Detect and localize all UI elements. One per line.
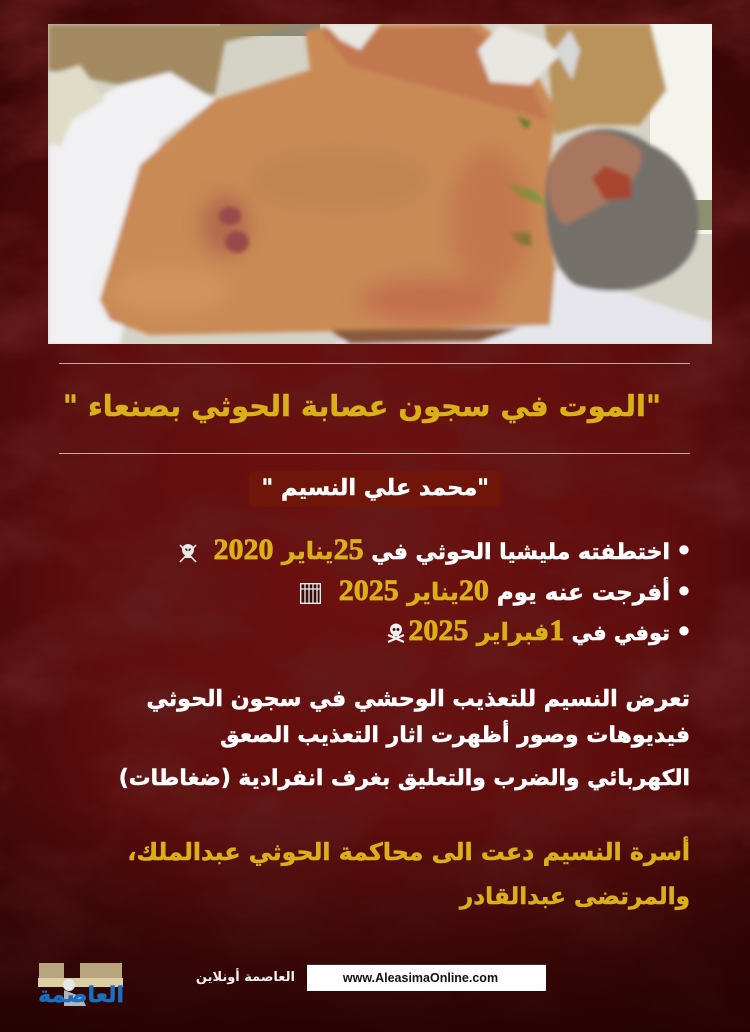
- paragraph: torture description: فيديوهات وصور أظهرت اثار التعذيب الصعق: [220, 723, 690, 748]
- divider top: [59, 363, 690, 364]
- paragraph: torture description: الكهربائي والضرب والتعليق بغرف انفرادية (ضغاطات): [119, 766, 690, 791]
- website box: [307, 964, 546, 991]
- divider bottom: [59, 453, 690, 454]
- logo: العاصمة: [38, 983, 124, 1008]
- heading: "الموت في سجون عصابة الحوثي بصنعاء ": [63, 389, 661, 423]
- website box: www.AleasimaOnline.com: [343, 971, 498, 985]
- icon: prison bars: [300, 583, 321, 604]
- site name: العاصمة أونلاين: [196, 970, 295, 985]
- paragraph: family demand: [127, 836, 690, 910]
- paragraph: family demand: أسرة النسيم دعت الى محاكمة الحوثي عبدالملك،: [127, 838, 690, 866]
- paragraph: family demand: والمرتضى عبدالقادر: [460, 883, 690, 910]
- list item: release: •أفرجت عنه يوم 20يناير 2025: [339, 574, 692, 607]
- list item: death: •توفي في 1فبراير 2025: [408, 614, 692, 647]
- photo: medical examination of the victim's back: [48, 24, 712, 344]
- icon: skull and crossbones: [388, 624, 404, 643]
- list item: abduction: •اختطفته مليشيا الحوثي في 25يناير 2020: [213, 533, 692, 566]
- name: "محمد علي النسيم ": [261, 475, 489, 501]
- name badge: [249, 471, 501, 507]
- logo: [38, 963, 124, 1008]
- paragraph: torture description: [119, 686, 690, 791]
- paragraph: torture description: تعرض النسيم للتعذيب الوحشي في سجون الحوثي: [146, 686, 690, 712]
- icon: skull with swords: [180, 544, 196, 562]
